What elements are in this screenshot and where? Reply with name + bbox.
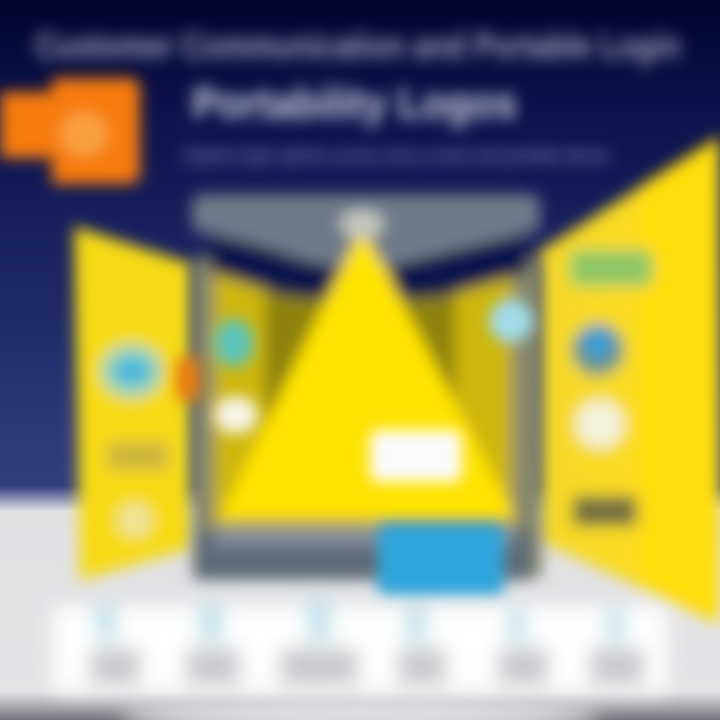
icon: screen upper right badge [489, 299, 533, 343]
icon: screen white badge [214, 396, 258, 434]
side shading right [380, 272, 455, 460]
cone top highlight [340, 210, 384, 238]
text: right wing lines [573, 496, 637, 526]
dark wedge right [385, 238, 528, 300]
device frame [192, 258, 542, 578]
badge: orange [0, 78, 140, 184]
icon: right white circle [576, 400, 624, 448]
text: left wing lines [108, 442, 168, 470]
callout: white box [370, 430, 462, 482]
card captions [90, 648, 644, 684]
device screen [214, 268, 512, 526]
icon: screen teal badge [214, 319, 254, 367]
icon: right blue circle [572, 324, 624, 376]
panel: right yellow wing [538, 136, 720, 624]
icon: left teal badge [101, 344, 163, 398]
dark wedge left [205, 238, 350, 300]
button: blue block [378, 524, 504, 596]
card accents [96, 600, 624, 640]
top shade band [192, 194, 540, 268]
connector: orange marker [176, 358, 200, 400]
yellow light cone [220, 226, 516, 518]
wing right edge fill [640, 136, 720, 624]
strip: bottom cards [52, 600, 668, 692]
side shading left [265, 272, 355, 480]
bottom bar [194, 530, 532, 580]
panel: central device [192, 194, 542, 580]
icon: left lower badge [118, 503, 152, 537]
label: right green pill [570, 250, 652, 286]
heading: main title: Portability Logos [192, 79, 517, 128]
panel: left yellow wing [74, 226, 192, 580]
floor bottom light [120, 698, 600, 720]
